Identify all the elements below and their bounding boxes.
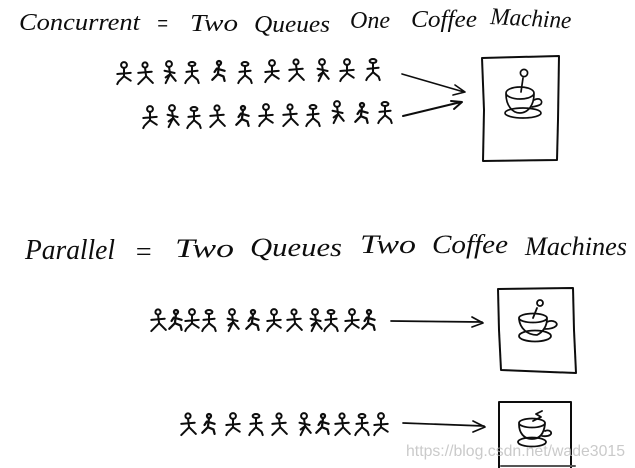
heading: Concurrent: = bbox=[156, 9, 169, 38]
heading: Parallel bbox=[24, 230, 627, 268]
heading: Parallel: Two bbox=[175, 234, 234, 263]
arrow: parallel bottom queue to machine bbox=[403, 421, 485, 432]
coffee machine: concurrent bbox=[482, 56, 559, 161]
heading: Concurrent: Coffee bbox=[411, 7, 477, 33]
heading: Concurrent: Two bbox=[190, 11, 238, 37]
heading: Concurrent: Machine bbox=[489, 4, 572, 34]
arrow: top queue to machine bbox=[402, 74, 465, 95]
queue: concurrent bottom row of people bbox=[143, 101, 392, 128]
heading: Parallel: Two bbox=[360, 230, 416, 259]
icon: coffee cup with steam bbox=[519, 300, 557, 342]
watermark: https://blog.csdn.net/wade3015 bbox=[406, 443, 625, 460]
arrow: bottom queue to machine bbox=[403, 101, 462, 116]
heading: Concurrent: Concurrent bbox=[19, 10, 141, 36]
icon: coffee cup with steam bbox=[505, 69, 542, 118]
heading: Parallel: Queues bbox=[250, 233, 342, 262]
queue: parallel bottom row of people bbox=[181, 413, 388, 435]
queue: parallel top row of people bbox=[151, 309, 375, 331]
arrow: parallel top queue to machine bbox=[391, 317, 483, 327]
heading: Concurrent: Queues bbox=[254, 12, 330, 38]
heading: Parallel: Coffee bbox=[432, 230, 508, 259]
heading: Parallel: = bbox=[134, 237, 153, 268]
queue: concurrent top row of people bbox=[117, 59, 380, 84]
icon: coffee cup with steam bbox=[518, 411, 551, 446]
heading: Concurrent: One bbox=[350, 8, 390, 34]
coffee machine: parallel top bbox=[498, 288, 576, 373]
heading: Concurrent bbox=[19, 4, 572, 38]
heading: Parallel: Machines bbox=[524, 232, 627, 261]
coffee machine: parallel bottom bbox=[499, 402, 575, 468]
heading: Parallel: Parallel bbox=[24, 234, 115, 266]
